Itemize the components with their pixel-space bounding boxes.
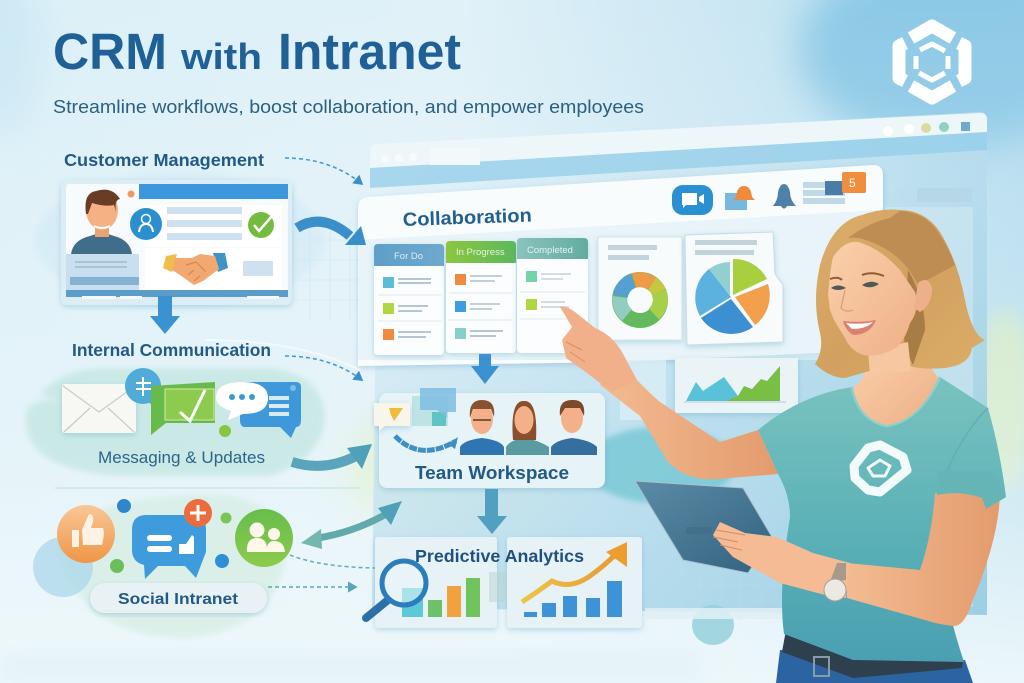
divider (55, 487, 360, 489)
arrow: dashed to team (285, 356, 362, 380)
arrow: dashed social to analytics (290, 555, 375, 568)
icon: green check message (151, 382, 215, 435)
panel: team workspace (374, 388, 605, 488)
title: with (180, 36, 262, 77)
arrow: dashed social pill (268, 586, 356, 588)
kanban: to do column: For Do (394, 251, 423, 262)
teal swirl behind tablet (585, 427, 735, 503)
decorative teal blob (692, 605, 734, 645)
panel: predictive analytics (366, 537, 642, 628)
illustration: presenter (560, 210, 1006, 683)
grid backdrop (290, 220, 790, 620)
icon: chat bubble (132, 515, 206, 579)
hair (815, 210, 985, 378)
face (828, 242, 917, 356)
tablet (635, 481, 772, 573)
kanban: completed column: Completed (527, 245, 573, 256)
arrow: social double arrow (301, 501, 402, 549)
arrow: dashed to window (285, 158, 362, 184)
trend arrow (522, 542, 627, 602)
area chart card (675, 358, 798, 413)
panel strip under dashboards (645, 608, 805, 619)
raised arm (600, 352, 778, 479)
icon: stacked messages (803, 172, 866, 204)
person: man (551, 400, 597, 455)
kanban: in progress column: In Progress (456, 247, 505, 258)
donut chart card (598, 237, 682, 340)
pie chart card (685, 232, 783, 345)
icon: envelope (62, 384, 136, 433)
bar chart left (402, 578, 480, 617)
kanban: to do column (374, 244, 444, 355)
sleeve cuff (937, 470, 1006, 509)
hand pointing (560, 307, 637, 392)
heading: Internal Communication (72, 340, 271, 360)
icon: handshake (163, 253, 228, 285)
subtitle: Streamline workflows, boost collaboration, and empower employees (53, 96, 644, 117)
label pill: Social Intranet (118, 591, 239, 608)
section: customer management (35, 150, 325, 308)
panel: back browser window (370, 112, 987, 615)
label pill (90, 583, 267, 613)
icon: plus badge (184, 499, 212, 527)
icon: customer avatar (71, 190, 132, 254)
icon: community (235, 509, 293, 567)
icon: white speech bubble (216, 382, 268, 420)
section: internal communication (26, 340, 360, 476)
kanban: completed column (517, 238, 588, 353)
crm card (61, 180, 292, 305)
icon: stacked messages: 5 (849, 176, 856, 190)
icon: magnifier (366, 561, 426, 618)
heading: Predictive Analytics (415, 546, 584, 566)
title: Intranet (278, 23, 461, 80)
jeans and belt (776, 630, 973, 683)
shirt (758, 377, 1006, 662)
icon: user badge (130, 208, 162, 240)
arrow: team to analytics (477, 489, 507, 534)
kanban: in progress column (446, 241, 516, 353)
title (53, 23, 461, 80)
eyes (831, 282, 879, 290)
arrow: customer to collaboration (297, 222, 366, 245)
logo (899, 26, 965, 98)
icon: video call (672, 185, 713, 215)
icon: check badge (248, 212, 274, 238)
nose (841, 290, 853, 311)
ear (914, 280, 932, 312)
hand on tablet (713, 522, 850, 598)
arm lower (847, 490, 1000, 626)
label: Team Workspace (415, 463, 569, 483)
neck (853, 345, 938, 425)
arrow: messaging to team (292, 444, 372, 469)
arrow: customer down (150, 296, 180, 334)
icon: notification with card (725, 186, 755, 210)
watch (824, 563, 846, 601)
hair top shading (848, 211, 955, 285)
arrow: collaboration to team (471, 354, 499, 384)
panel: collaboration window (358, 165, 883, 366)
person: man with glasses (460, 400, 504, 455)
label: Messaging & Updates (98, 449, 265, 467)
title: CRM (53, 23, 167, 80)
icon: blue chat card (240, 382, 301, 438)
bar chart right (524, 581, 622, 617)
person: woman (506, 401, 549, 455)
smile (843, 320, 876, 335)
side dashboard card (620, 360, 666, 420)
icon: workflow tiles (374, 388, 458, 450)
icon: teal chat bubble (125, 368, 161, 412)
heading: Customer Management (64, 150, 264, 170)
heading: Collaboration: Collaboration (402, 206, 532, 231)
icon: bell (773, 184, 796, 208)
shirt logo (854, 445, 907, 492)
icon: thumbs up (57, 505, 115, 563)
section: social intranet (33, 494, 293, 638)
